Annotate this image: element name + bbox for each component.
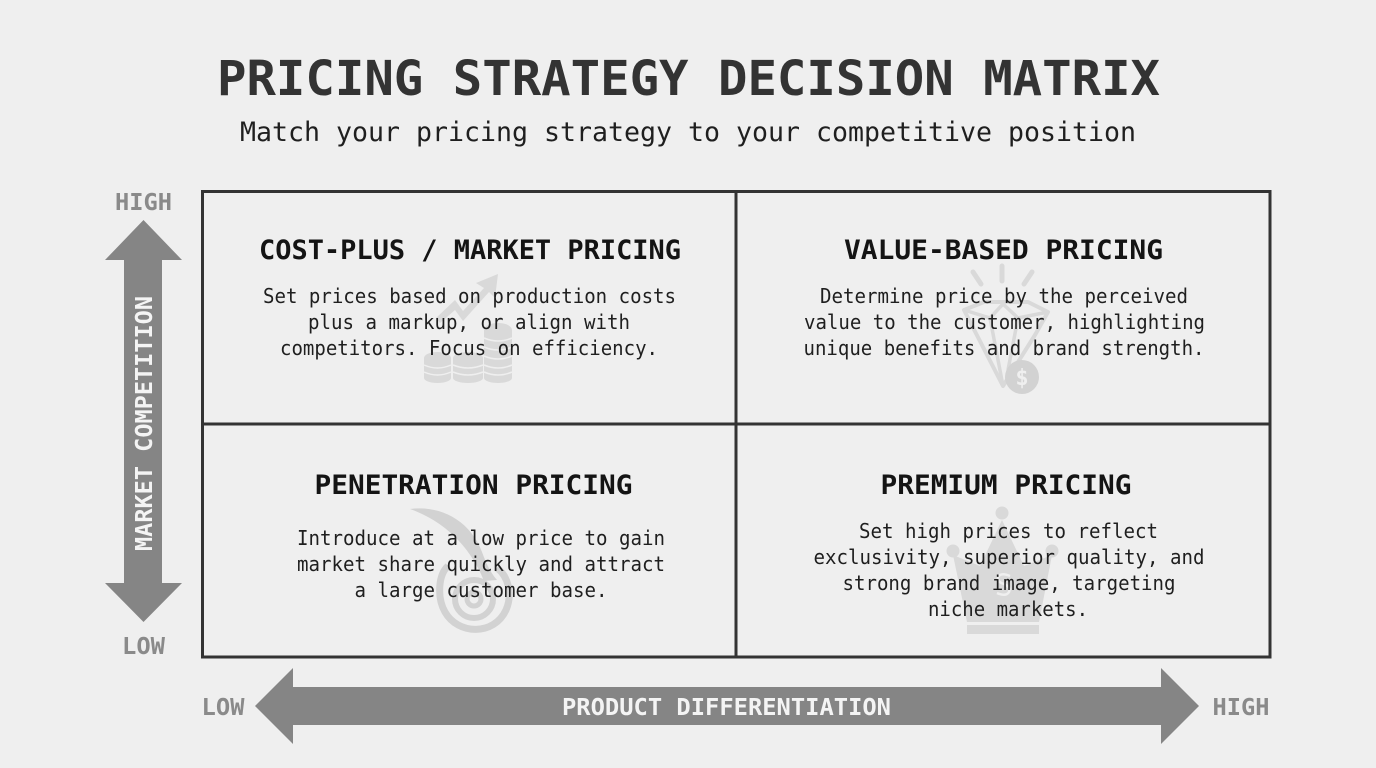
matrix grid xyxy=(202,191,1270,657)
x axis title: PRODUCT DIFFERENTIATION xyxy=(562,693,891,721)
heading: COST-PLUS / MARKET PRICING xyxy=(259,235,681,266)
body text xyxy=(263,284,676,360)
body text: niche markets. xyxy=(928,597,1088,621)
body text: a large customer base. xyxy=(354,578,608,602)
body text: strong brand image, targeting xyxy=(842,571,1176,595)
y axis title: MARKET COMPETITION xyxy=(130,296,158,551)
panel: premium pricing xyxy=(814,470,1204,634)
icon: diamond with dollar coin xyxy=(964,266,1048,394)
panel: value-based pricing xyxy=(804,235,1205,394)
body text: market share quickly and attract xyxy=(297,552,665,576)
body text: Introduce at a low price to gain xyxy=(297,526,665,550)
subtitle: Match your pricing strategy to your competitive position xyxy=(240,117,1136,148)
x axis high label: HIGH xyxy=(1212,693,1270,721)
arrow: product differentiation xyxy=(255,668,1199,744)
body text xyxy=(804,284,1205,360)
body text: Set high prices to reflect xyxy=(859,519,1158,543)
body text: exclusivity, superior quality, and xyxy=(814,545,1204,569)
heading: PREMIUM PRICING xyxy=(880,470,1132,501)
heading: PENETRATION PRICING xyxy=(314,470,632,501)
body text: value to the customer, highlighting xyxy=(804,310,1205,334)
icon: crown xyxy=(946,506,1058,634)
icon: diamond with dollar coin: $ xyxy=(1015,366,1029,391)
body text: Set prices based on production costs xyxy=(263,284,676,308)
y axis low label: LOW xyxy=(122,632,166,660)
panel: penetration pricing xyxy=(297,470,665,629)
panel: cost-plus / market pricing xyxy=(259,235,681,383)
coin xyxy=(1005,360,1039,394)
y axis high label: HIGH xyxy=(115,188,172,216)
x axis low label: LOW xyxy=(202,693,245,721)
icon: coin stacks with rising arrow xyxy=(424,274,512,383)
icon: swoosh into spiral target xyxy=(410,508,509,629)
body text: unique benefits and brand strength. xyxy=(804,336,1204,360)
body text: plus a markup, or align with xyxy=(308,310,630,334)
body text: competitors. Focus on efficiency. xyxy=(280,336,658,360)
arrow: market competition xyxy=(105,220,182,622)
body text: Determine price by the perceived xyxy=(820,284,1188,308)
heading: VALUE-BASED PRICING xyxy=(844,235,1163,266)
body text xyxy=(297,526,665,602)
body text xyxy=(814,519,1204,621)
title: PRICING STRATEGY DECISION MATRIX xyxy=(217,51,1160,107)
